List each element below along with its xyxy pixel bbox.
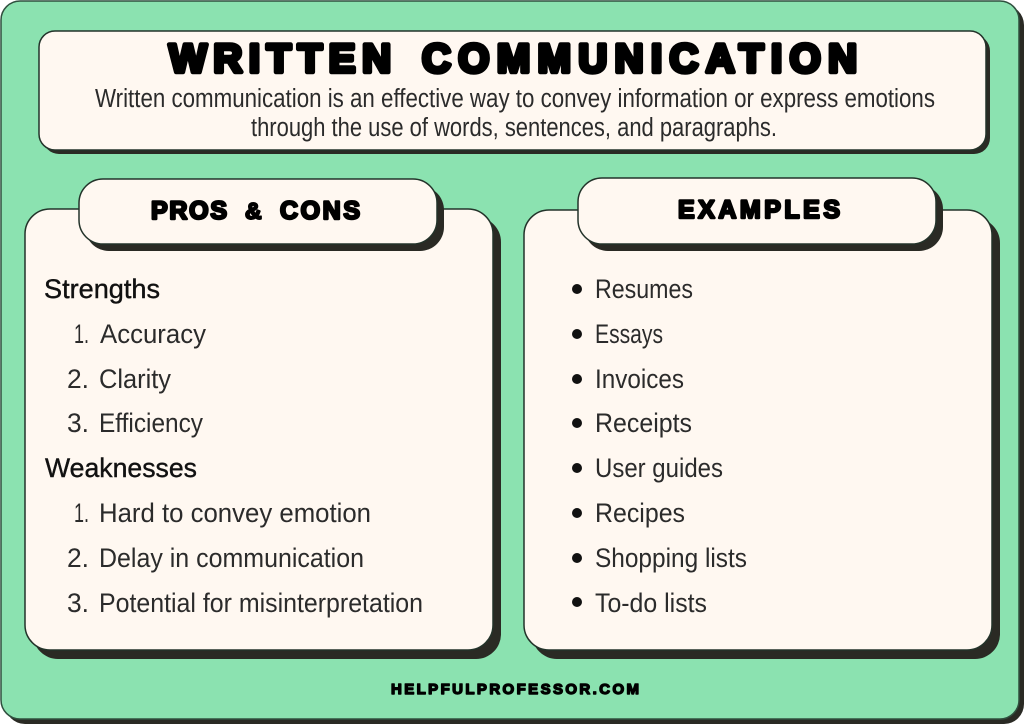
strengths list: 1.: [74, 319, 89, 349]
strengths list: Clarity: [99, 364, 171, 394]
strengths list: 3.: [67, 408, 89, 438]
examples bullet list: Essays: [595, 319, 663, 349]
strengths list: Efficiency: [99, 408, 203, 438]
tab: examples heading: EXAMPLES: [678, 196, 840, 224]
examples bullet list: To-do lists: [595, 588, 707, 618]
examples bullet list: Recipes: [595, 498, 685, 528]
examples bullet list: Receipts: [595, 408, 692, 438]
weaknesses heading: Weaknesses: [45, 453, 197, 483]
tab: pros and cons heading: [79, 179, 444, 251]
tab: pros and cons heading: CONS: [280, 197, 360, 225]
examples bullet list: User guides: [595, 453, 723, 483]
description: through the use of words, sentences, and paragraphs.: [251, 114, 777, 142]
weaknesses list: Delay in communication: [99, 543, 364, 573]
weaknesses list: [67, 498, 423, 618]
examples bullet list: Resumes: [595, 274, 693, 304]
strengths list: Accuracy: [100, 319, 206, 349]
weaknesses list: 3.: [67, 588, 89, 618]
weaknesses list: 2.: [67, 543, 89, 573]
strengths list: [67, 319, 206, 438]
examples bullet list: Invoices: [595, 364, 684, 394]
weaknesses list: Hard to convey emotion: [99, 498, 371, 528]
description: [95, 85, 935, 142]
header panel: [39, 31, 990, 154]
weaknesses list: 1.: [74, 498, 89, 528]
panel: examples: [524, 210, 1000, 659]
examples bullet list: [572, 274, 747, 618]
weaknesses list: Potential for misinterpretation: [99, 588, 423, 618]
examples bullet list: Shopping lists: [595, 543, 747, 573]
title: COMMUNICATION: [422, 37, 857, 81]
footer website: HELPFULPROFESSOR.COM: [391, 681, 639, 698]
tab: pros and cons heading: PROS: [151, 197, 227, 225]
tab: pros and cons heading: &: [245, 198, 262, 224]
strengths list: 2.: [67, 364, 89, 394]
title: WRITTEN: [169, 37, 391, 81]
panel: pros and cons: [25, 209, 501, 659]
title: [169, 37, 857, 81]
tab: examples heading: [578, 178, 943, 251]
strengths heading: Strengths: [44, 274, 160, 304]
